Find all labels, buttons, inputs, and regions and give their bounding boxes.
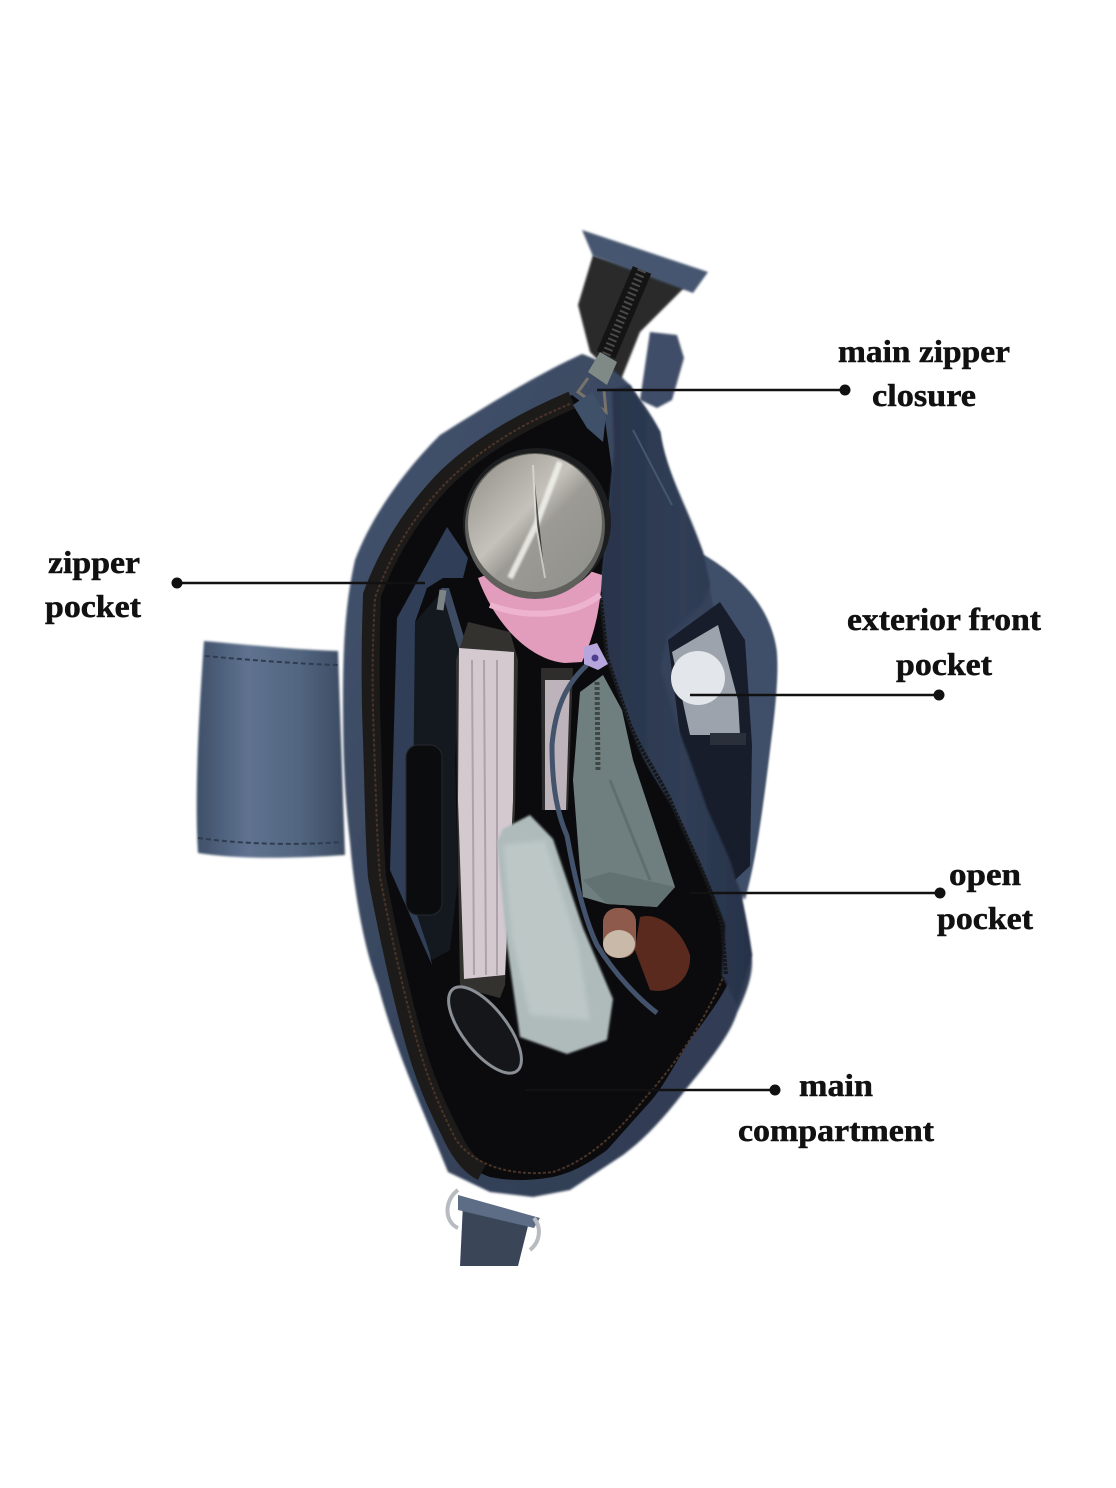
icon: bottom strap and ring (448, 1190, 540, 1266)
callout: exterior front pocket: pocket (896, 646, 992, 682)
callout: open pocket: pocket (937, 900, 1033, 936)
exterior front pocket flap (600, 385, 777, 1005)
zipper tape (370, 400, 572, 1172)
main compartment lining (366, 395, 735, 1180)
icon: glass lid (436, 975, 534, 1085)
callout: zipper pocket: pocket (45, 588, 141, 624)
icon: side strap loop (197, 641, 345, 858)
callout: exterior front pocket: exterior front (847, 601, 1041, 637)
notebooks (456, 622, 573, 998)
callout: main compartment: compartment (738, 1112, 934, 1148)
open pocket edge (552, 643, 657, 1013)
grey zip pouch (573, 675, 675, 907)
icon: thermos bottle (463, 448, 611, 663)
callout: main zipper closure: closure (872, 377, 976, 413)
callout: open pocket (690, 856, 1033, 936)
callout: main compartment (525, 1067, 934, 1148)
callout: main zipper closure: main zipper (838, 333, 1010, 369)
callout: zipper pocket (45, 544, 425, 624)
icon: white bottle in front pocket (671, 625, 746, 745)
callout: main compartment: main (799, 1067, 873, 1103)
bag body (343, 354, 777, 1197)
icon: top zipper tab (578, 230, 708, 382)
icon: main zipper pull (573, 352, 617, 442)
callout: main zipper closure (597, 333, 1010, 413)
callout: exterior front pocket (690, 601, 1041, 700)
callout: open pocket: open (949, 856, 1021, 892)
callout: zipper pocket: zipper (48, 544, 140, 580)
folded grey cloth (497, 815, 613, 1054)
icon: rear strap behind zipper (640, 332, 684, 408)
icon: cosmetic bottles (603, 908, 690, 991)
zipper pocket (390, 527, 494, 965)
